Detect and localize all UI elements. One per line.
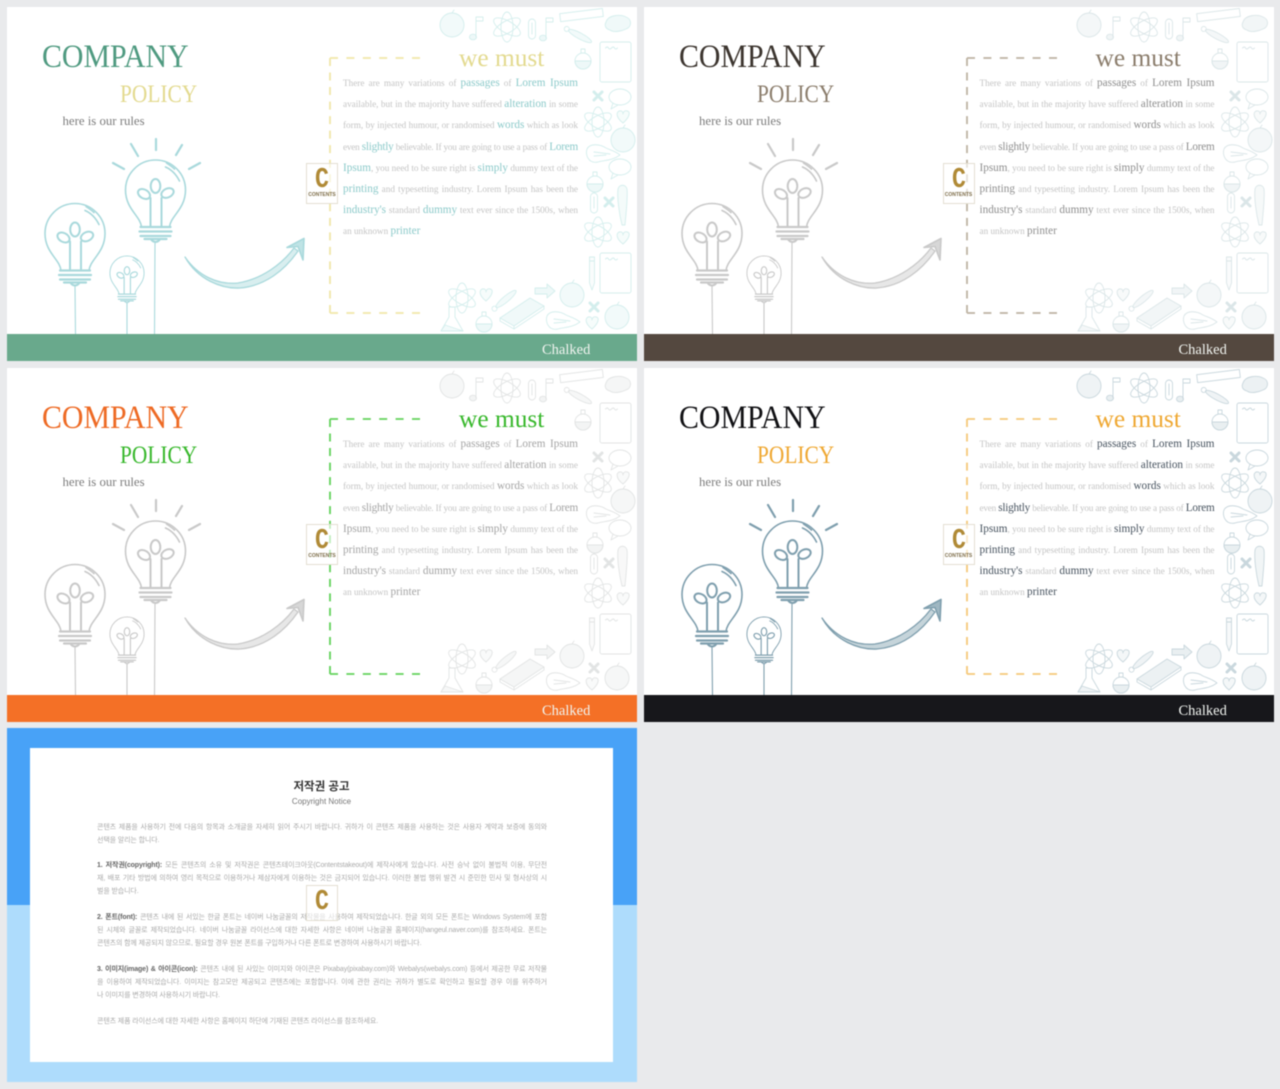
footer bar: [7, 695, 638, 722]
text block: form, by injected humour, or randomised words which as look: [980, 119, 1214, 131]
logo: CONTENTS: [945, 553, 972, 559]
logo: CONTENTS: [308, 553, 336, 559]
title: company: COMPANY: [42, 400, 189, 436]
illustration: bulbs, arrow and doodles: [44, 8, 636, 334]
arrow: [822, 238, 940, 288]
title: policy: POLICY: [120, 442, 197, 469]
footer label: Chalked: [1178, 702, 1227, 718]
footer bar: [644, 695, 1274, 722]
illustration: bulbs, arrow and doodles: [680, 368, 1273, 696]
logo: [942, 163, 974, 204]
icon: three light bulbs: [682, 500, 836, 695]
title: policy: POLICY: [756, 442, 834, 469]
panel: slide black: [644, 368, 1274, 722]
panel: copyright notice: [7, 728, 637, 1082]
logo: CONTENTS: [308, 192, 336, 198]
text block: available, but in the majority have suffered alteration in some: [343, 459, 578, 471]
logo: C: [315, 885, 329, 918]
illustration: bulbs, arrow and doodles: [680, 8, 1273, 334]
doodle border: [440, 369, 635, 693]
title: company: COMPANY: [678, 400, 825, 436]
text block: There are many variations of passages of Lorem Ipsum: [343, 438, 578, 450]
text block: printing and typesetting industry. Lorem Ipsum has been the: [343, 544, 578, 556]
heading: we must: we must: [459, 44, 544, 72]
subtitle: here is our rules: [699, 475, 781, 489]
logo: [306, 163, 338, 204]
text block: an unknown printer: [343, 225, 420, 237]
title: company: COMPANY: [42, 38, 189, 74]
section 3 line 3: 나 이미지를 변경하여 사용하시기 바랍니다.: [97, 992, 220, 999]
logo: [306, 885, 338, 921]
footer label: Chalked: [542, 342, 590, 358]
arrow: [822, 600, 940, 649]
dashed bracket: [330, 419, 420, 674]
heading: we must: we must: [1096, 44, 1181, 72]
text block: available, but in the majority have suffered alteration in some: [980, 459, 1214, 471]
text block: form, by injected humour, or randomised words which as look: [343, 119, 578, 131]
text block: form, by injected humour, or randomised words which as look: [343, 480, 578, 492]
logo: C: [315, 163, 329, 196]
text block: even slightly believable. If you are going to use a pass of Lorem: [343, 502, 578, 514]
panel: slide orange: [7, 368, 637, 722]
section 2 line 1: 2. 폰트(font): 콘텐츠 내에 된 서있는 한글 폰트는 네이버 나눔글꼴의 저작물을 사용하여 제작되었습니다. 한글 외의 모든 폰트는 Windows System에 포함: [97, 914, 547, 921]
text block: Ipsum, you need to be sure right is simply dummy text of the: [980, 523, 1214, 535]
notice subtitle: Copyright Notice: [292, 796, 351, 806]
text block: printing and typesetting industry. Lorem Ipsum has been the: [343, 183, 578, 195]
text block: an unknown printer: [980, 586, 1057, 598]
footer bar: [7, 334, 638, 361]
intro paragraph: 콘텐츠 제품을 사용하기 전에 다음의 항목과 소개글을 자세히 읽어 주시기 바랍니다. 귀하가 이 콘텐츠 제품을 사용하는 것은 사용자 계약과 보증에 동의와: [97, 824, 547, 831]
illustration: bulbs, arrow and doodles: [44, 368, 636, 696]
doodle border: [1076, 369, 1272, 693]
notice paper: [30, 748, 613, 1062]
text block: Ipsum, you need to be sure right is simply dummy text of the: [343, 162, 578, 174]
dashed bracket: [966, 419, 1056, 674]
heading: we must: we must: [1096, 404, 1181, 432]
section 1 line 1: 1. 저작권(copyright): 모든 콘텐츠의 소유 및 저작권은 콘텐츠테이크아웃(Contentstakeout)에 제작사에게 있습니다. 사전 승낙 없이 불법적 이용, 무단전: [97, 862, 547, 869]
notice title: 저작권 공고: [293, 781, 350, 793]
text block: printing and typesetting industry. Lorem Ipsum has been the: [980, 544, 1214, 556]
section 1 line 3: 벌을 받습니다.: [97, 888, 139, 895]
subtitle: here is our rules: [699, 114, 781, 128]
text block: industry's standard dummy text ever since the 1500s, when: [980, 204, 1214, 216]
icon: three light bulbs: [45, 500, 200, 695]
text block: [979, 77, 1215, 237]
text block: an unknown printer: [343, 586, 420, 598]
section 3 line 2: 을 이용하여 제작되었습니다. 이미지는 참고모만 제공되고 콘텐츠에는 포함합니다. 이에 관한 권리는 귀하가 별도로 확인하고 필요할 경우 이를 위주하거: [97, 979, 547, 986]
text block: even slightly believable. If you are going to use a pass of Lorem: [980, 502, 1214, 514]
heading: we must: we must: [459, 404, 544, 432]
text block: industry's standard dummy text ever since the 1500s, when: [980, 565, 1214, 577]
subtitle: here is our rules: [62, 475, 145, 489]
dashed bracket: [330, 58, 420, 313]
arrow: [185, 600, 304, 649]
footer bar: [644, 334, 1274, 361]
text block: [342, 77, 578, 237]
text block: available, but in the majority have suffered alteration in some: [343, 98, 578, 110]
text block: even slightly believable. If you are going to use a pass of Lorem: [343, 141, 578, 153]
text block: industry's standard dummy text ever since the 1500s, when: [343, 565, 578, 577]
section 2 line 2: 된 시체와 글꼴로 제작되었습니다. 네이버 나눔글꼴 라이선스에 대한 자세한 사항은 네이버 나눔글꼴 홈페이지(hangeul.naver.com)를 참조하세요. 폰트는: [97, 927, 547, 934]
panel: slide brown: [644, 7, 1274, 361]
text block: printing and typesetting industry. Lorem Ipsum has been the: [980, 183, 1214, 195]
text block: There are many variations of passages of Lorem Ipsum: [980, 77, 1215, 89]
section 3 line 1: 3. 이미지(image) & 아이콘(icon): 콘텐츠 내에 된 사있는 이미지와 아이콘은 Pixabay(pixabay.com)와 Webalys(webalys.com) 등에서 제공한 무료 저작물: [97, 966, 547, 973]
dashed bracket: [966, 58, 1056, 313]
text block: Ipsum, you need to be sure right is simply dummy text of the: [343, 523, 578, 535]
section 2 line 3: 콘텐츠의 함께 제공되지 않으므로, 필요할 경우 원본 폰트를 구입하거나 다른 폰트로 변경하여 사용하시기 바랍니다.: [97, 940, 421, 947]
text block: There are many variations of passages of Lorem Ipsum: [980, 438, 1215, 450]
text block: an unknown printer: [980, 225, 1057, 237]
text block: There are many variations of passages of Lorem Ipsum: [343, 77, 578, 89]
logo: [306, 524, 338, 565]
logo: CONTENTS: [945, 192, 972, 198]
footer label: Chalked: [1178, 342, 1227, 358]
arrow: [185, 238, 304, 288]
section 1 line 2: 재, 배포 기타 방법에 의하여 영리 목적으로 이용하거나 제삼자에게 이용하는 것은 금지되어 있습니다. 이러한 불법 행위 발견 시 준민한 민사 및 형사상의 시: [97, 875, 547, 882]
text block: form, by injected humour, or randomised words which as look: [980, 480, 1214, 492]
text block: [979, 438, 1215, 598]
title: policy: POLICY: [756, 81, 834, 108]
doodle border: [440, 8, 635, 332]
logo: [942, 524, 974, 565]
title: policy: POLICY: [120, 81, 197, 108]
text block: available, but in the majority have suffered alteration in some: [980, 98, 1214, 110]
panel: slide green: [7, 7, 637, 361]
doodle border: [1076, 8, 1272, 332]
subtitle: here is our rules: [62, 114, 145, 128]
logo: C: [952, 524, 965, 557]
closing line: 콘텐츠 제품 라이선스에 대한 자세한 사항은 홈페이지 하단에 기재된 콘텐츠 라이선스를 참조하세요.: [97, 1018, 378, 1025]
text block: even slightly believable. If you are going to use a pass of Lorem: [980, 141, 1214, 153]
intro paragraph end: 선택을 알리는 합니다.: [97, 837, 159, 844]
logo: C: [952, 163, 965, 196]
text block: [342, 438, 578, 598]
text block: industry's standard dummy text ever since the 1500s, when: [343, 204, 578, 216]
logo: C: [315, 524, 329, 557]
icon: three light bulbs: [682, 139, 836, 334]
text block: Ipsum, you need to be sure right is simply dummy text of the: [980, 162, 1214, 174]
footer label: Chalked: [542, 702, 590, 718]
title: company: COMPANY: [678, 38, 825, 74]
icon: three light bulbs: [45, 139, 200, 334]
